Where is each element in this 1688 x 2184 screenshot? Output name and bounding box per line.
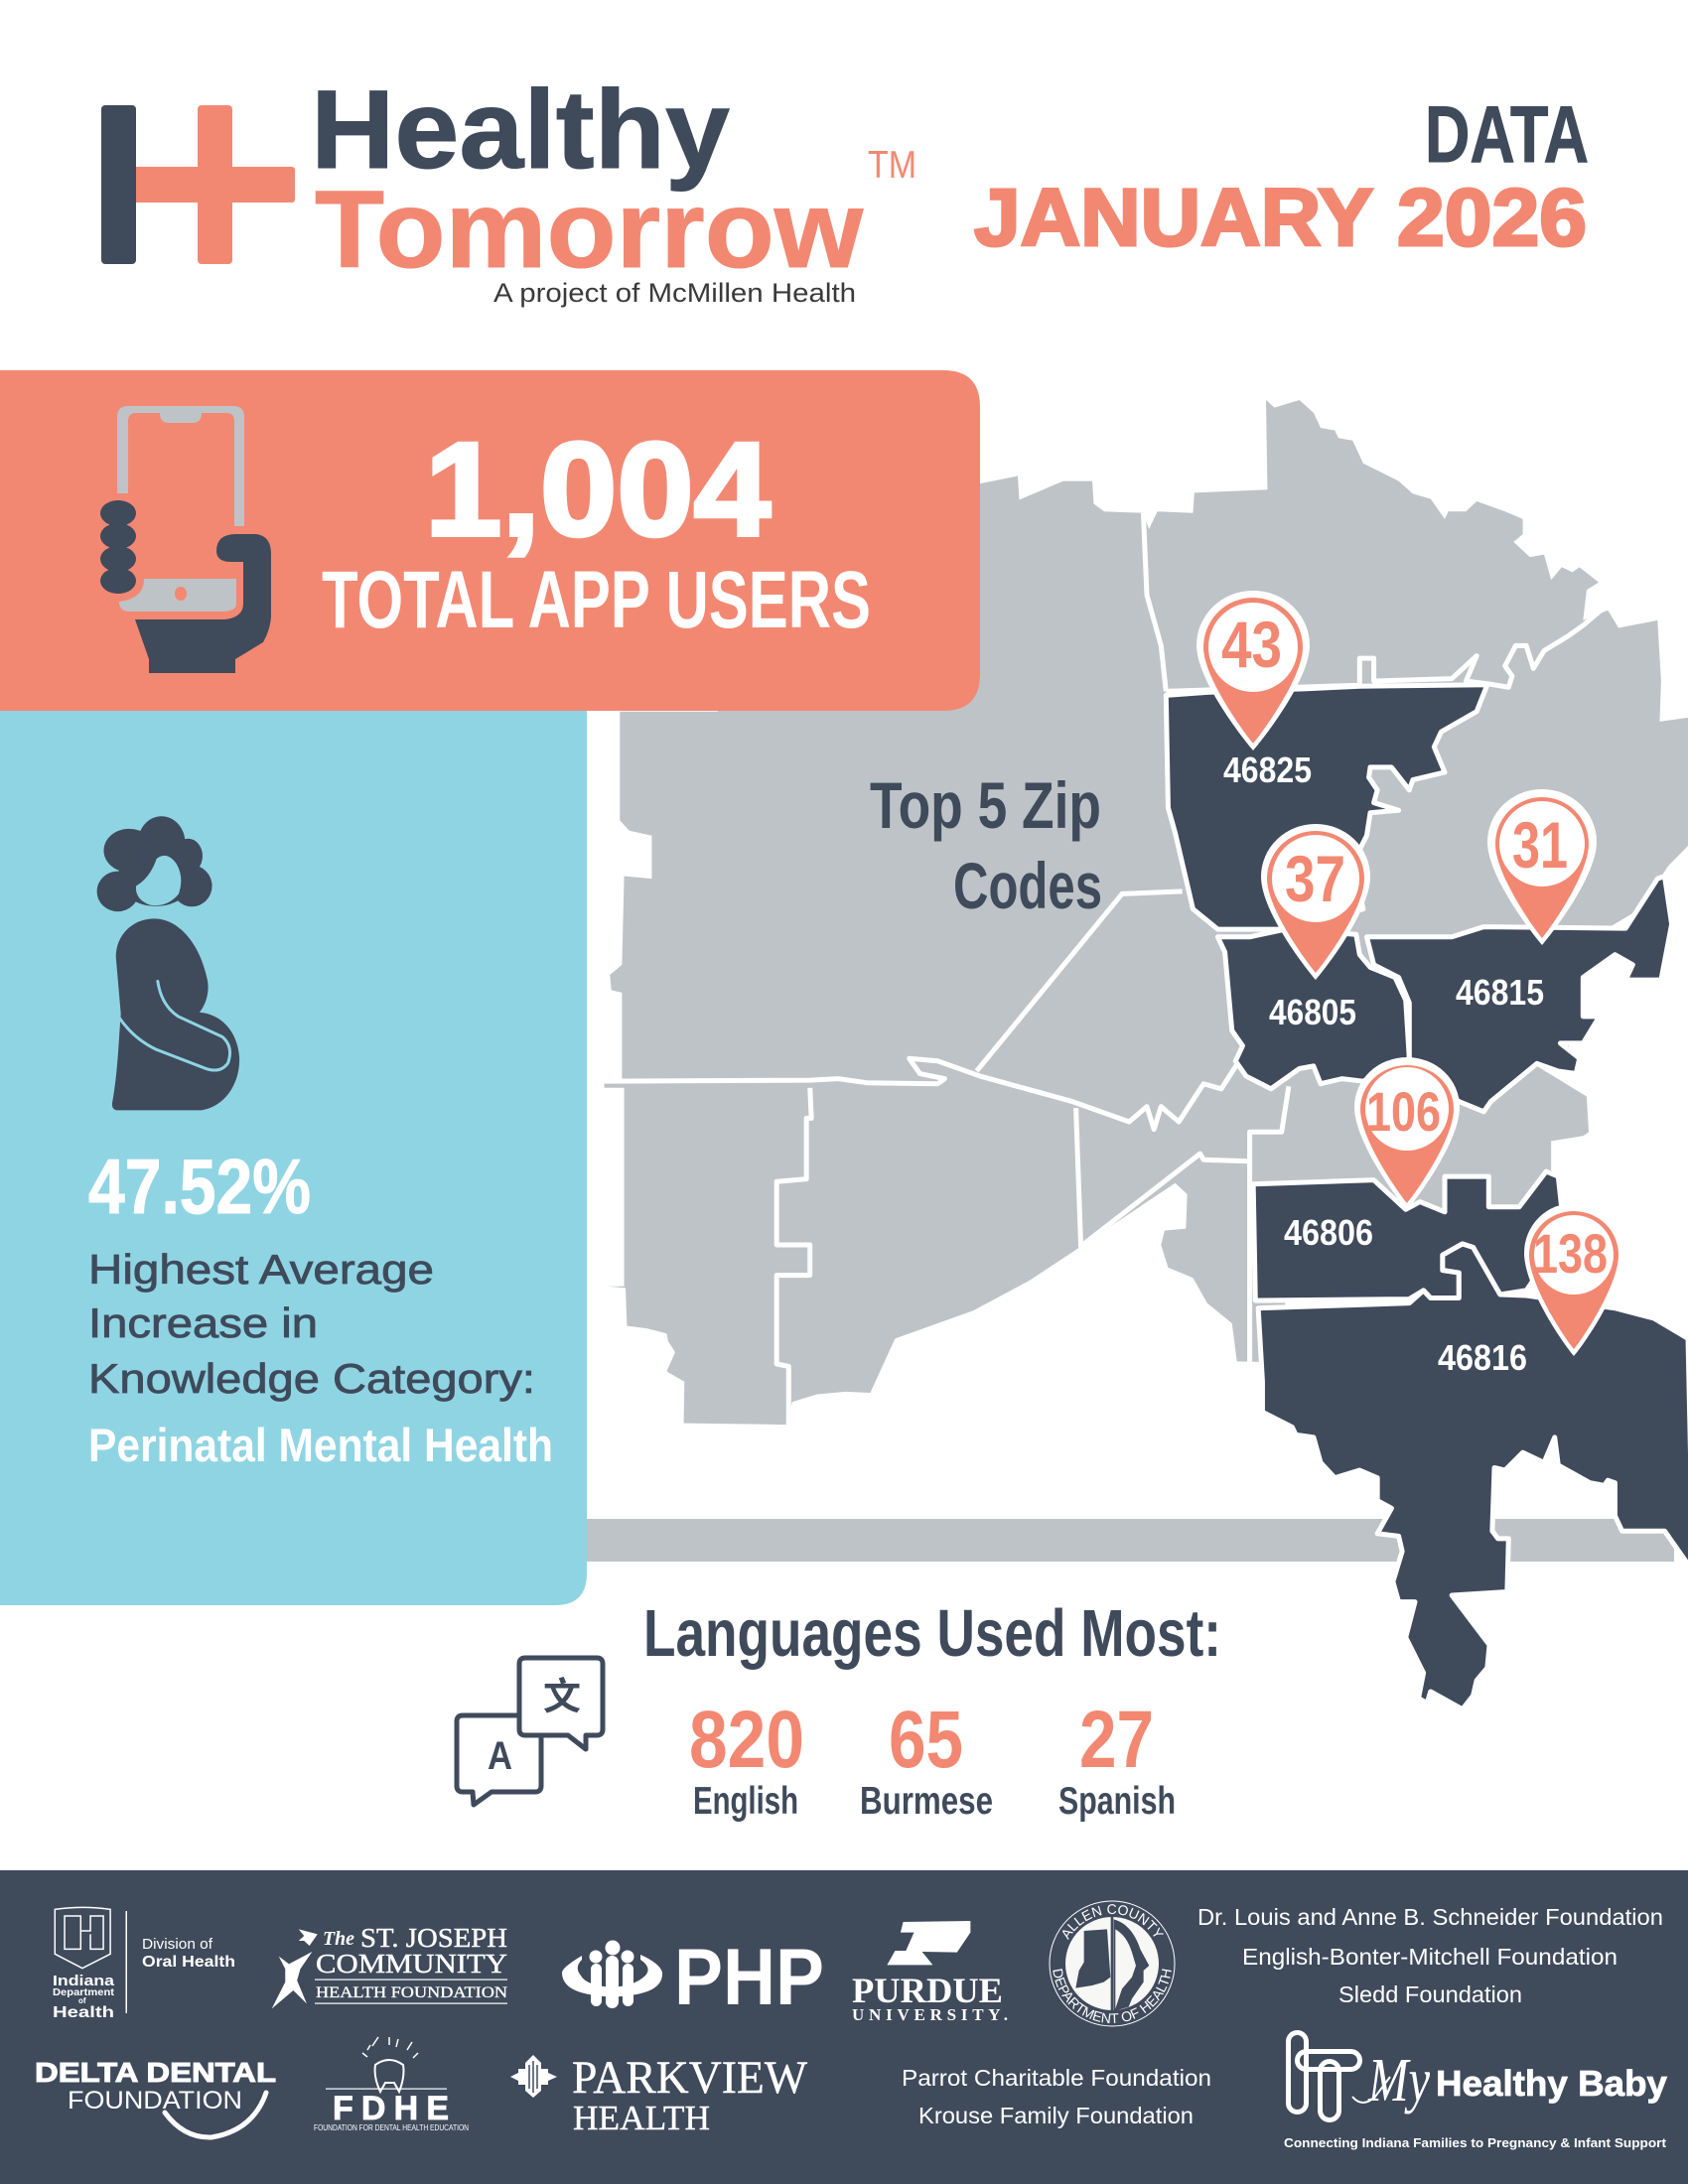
- logo: Indiana Department of Health: Division of: [142, 1936, 213, 1953]
- logo: Allen County Department of Health seal: ALLEN COUNTY: [1062, 1904, 1164, 1940]
- logo: PHP: PHP: [674, 1933, 824, 2022]
- logo: Healthy Tomorrow: A project of McMillen Health: [493, 278, 856, 308]
- map pin: 31: [1487, 789, 1597, 945]
- region 46805: [1217, 929, 1409, 1089]
- map pin: 138: [1524, 1203, 1623, 1356]
- icon: hand holding phone: [100, 406, 271, 673]
- logo: FDHE: FOUNDATION FOR DENTAL HEALTH EDUCATION: [314, 2123, 469, 2132]
- logo: Parkview Health: [510, 2052, 808, 2137]
- text: description: Highest Average: [88, 1246, 434, 1293]
- map pin: 106: 106: [1366, 1080, 1441, 1143]
- map: dark zip regions: [1166, 685, 1688, 1709]
- logo: Indiana Department of Health: Indiana: [53, 1973, 115, 1989]
- zip code labels: 46805: [1269, 992, 1356, 1032]
- logo: St. Joseph Community Health Foundation: [272, 1923, 508, 2008]
- region 46816: [1258, 1244, 1688, 1709]
- stat: 47.52%: 47.52%: [88, 1143, 311, 1230]
- text: foundations list one: Sledd Foundation: [1338, 1981, 1522, 2007]
- logo: St. Joseph Community Health Foundation: The: [323, 1928, 354, 1950]
- zip code labels: [1223, 750, 1544, 1378]
- logo: St. Joseph Community Health Foundation: ST. JOSEPH: [360, 1923, 507, 1953]
- map pin: 31: 31: [1512, 808, 1568, 882]
- logo: Purdue University: UNIVERSITY.: [852, 2005, 1008, 2024]
- map: county zip code regions: [586, 400, 1688, 1709]
- logo: Parkview Health: HEALTH: [573, 2099, 710, 2137]
- panel: knowledge increase: [0, 695, 587, 1605]
- logo mark: [101, 105, 295, 264]
- text: top 5 zip codes: Top 5 Zip: [870, 768, 1101, 842]
- logo: FDHE: [314, 2037, 469, 2132]
- text: total app users: TOTAL APP USERS: [322, 555, 871, 645]
- logo: Healthy Tomorrow: TM: [868, 144, 916, 187]
- zip code labels: 46806: [1284, 1212, 1373, 1253]
- logo: Delta Dental Foundation: DELTA DENTAL: [35, 2057, 276, 2088]
- icon: translation bubbles: [457, 1658, 603, 1805]
- text: top 5 zip codes: Codes: [953, 849, 1102, 922]
- map pin: 37: 37: [1285, 842, 1345, 915]
- stat: Spanish: 27: [1079, 1695, 1154, 1785]
- stat: English: [689, 1695, 804, 1823]
- zip code labels: 46816: [1438, 1337, 1527, 1378]
- text: foundations list one: English-Bonter-Mitchell Foundation: [1242, 1944, 1618, 1970]
- stat: 1,004: 1,004: [425, 416, 771, 564]
- text: foundations list two: Krouse Family Foundation: [918, 2103, 1194, 2128]
- region 46815: [1366, 877, 1672, 1112]
- logo: St. Joseph Community Health Foundation: COMMUNITY: [316, 1949, 507, 1979]
- logo: Purdue University: [852, 1921, 1008, 2024]
- logo: St. Joseph Community Health Foundation: HEALTH FOUNDATION: [316, 1984, 508, 2001]
- stat: English: English: [693, 1780, 798, 1823]
- logo: Indiana Department of Health: Oral Health: [142, 1954, 235, 1971]
- logo: My Healthy Baby: My: [1367, 2047, 1430, 2115]
- stat: Burmese: Burmese: [860, 1780, 993, 1823]
- map: gray base region: [605, 400, 1688, 1425]
- logo: Allen County Department of Health seal: [1049, 1900, 1176, 2027]
- logo: My Healthy Baby: Connecting Indiana Families to Pregnancy & Infant Support: [1284, 2135, 1667, 2150]
- stat: Burmese: [860, 1695, 993, 1823]
- logo: Parkview Health: PARKVIEW: [572, 2052, 808, 2104]
- logo: FDHE: FDHE: [333, 2090, 449, 2127]
- text: foundations list one: Dr. Louis and Anne B. Schneider Foundation: [1197, 1904, 1663, 1930]
- icon: translation bubbles: 文: [543, 1677, 581, 1718]
- logo: PHP: [562, 1933, 824, 2022]
- logo: Purdue University: PURDUE: [852, 1971, 1003, 2010]
- zip code labels: 46815: [1456, 972, 1544, 1013]
- map pin: 106: [1354, 1057, 1460, 1210]
- logo: Indiana Department of Health: Health: [53, 2004, 114, 2021]
- logo wordmark: Healthy: [311, 68, 730, 192]
- heading: data date: DATA: [1425, 90, 1589, 180]
- region 46825: [1166, 685, 1487, 929]
- logo: Healthy Tomorrow: [101, 68, 916, 308]
- text: foundations list two: [902, 2065, 1211, 2128]
- map pin: 138: 138: [1533, 1222, 1608, 1285]
- zip code labels: 46825: [1223, 750, 1312, 790]
- text: description: Increase in: [88, 1299, 318, 1346]
- logo: Indiana Department of Health: [53, 1907, 235, 2021]
- heading: data date: [974, 90, 1589, 263]
- map pin: 43: 43: [1221, 608, 1282, 681]
- stat: Spanish: [1058, 1695, 1176, 1823]
- logo: My Healthy Baby: [1284, 2033, 1667, 2150]
- icon: pregnant woman: [97, 816, 239, 1110]
- logo: Allen County Department of Health seal: DEPARTMENT OF HEALTH: [1053, 1969, 1172, 2023]
- logo: My Healthy Baby: Healthy Baby: [1436, 2063, 1667, 2104]
- region 46806: [1253, 1171, 1569, 1300]
- map pin: 37: [1261, 824, 1370, 980]
- logo: Healthy Tomorrow: Tomorrow: [315, 169, 863, 291]
- logo: Indiana Department of Health: of: [78, 1996, 86, 2005]
- text: description: [88, 1246, 535, 1402]
- logo: Delta Dental Foundation: [35, 2057, 276, 2137]
- map: gray horizontal band: [586, 1519, 1674, 1562]
- text: top 5 zip codes: [870, 768, 1102, 922]
- stat: Burmese: 65: [889, 1695, 963, 1785]
- heading: data date: JANUARY: [974, 173, 1373, 263]
- logo: Delta Dental Foundation: FOUNDATION: [68, 2087, 242, 2115]
- text: foundations list one: [1197, 1904, 1663, 2007]
- logo: Indiana Department of Health: Department: [53, 1987, 115, 1998]
- map pin: 43: [1196, 591, 1310, 751]
- text: category: Perinatal Mental Health: [88, 1419, 553, 1471]
- panel: total app users: [0, 370, 980, 711]
- section: languages: [457, 1596, 1221, 1823]
- text: description: Knowledge Category:: [88, 1355, 535, 1402]
- heading: languages used most: Languages Used Most:: [643, 1596, 1221, 1671]
- text: foundations list two: Parrot Charitable Foundation: [902, 2065, 1211, 2091]
- stat: Spanish: Spanish: [1058, 1780, 1176, 1823]
- heading: data date: 2026: [1397, 173, 1587, 263]
- stat: English: 820: [689, 1695, 804, 1785]
- icon: translation bubbles: A: [488, 1734, 512, 1778]
- footer: sponsors: [0, 1870, 1688, 2184]
